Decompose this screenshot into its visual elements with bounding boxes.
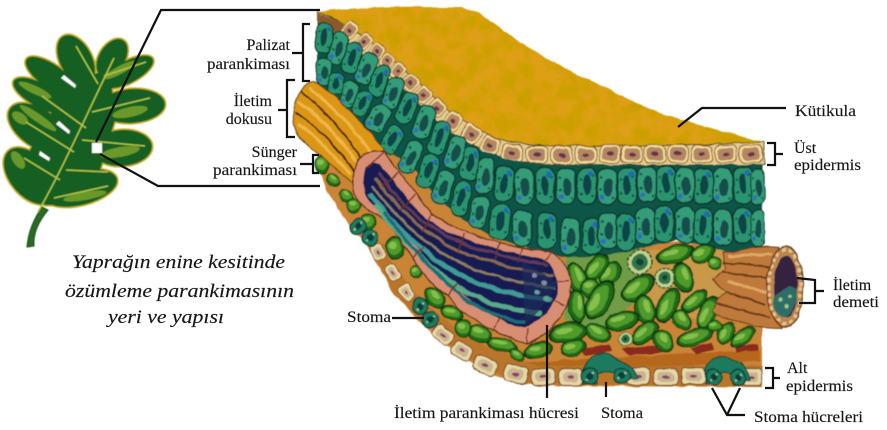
- label: Alt epidermis: Alt: [787, 360, 808, 377]
- caption: [65, 252, 294, 328]
- label: Üst epidermis: [767, 139, 861, 174]
- label: Stoma hücreleri: Stoma hücreleri: [754, 409, 864, 426]
- label: Kütikula: [678, 103, 856, 127]
- upper epidermis: [318, 11, 764, 165]
- leaf outline: [0, 29, 166, 214]
- cut-out sample square: [92, 143, 102, 153]
- label: İletim parankiması hücresi: İletim parankiması hücresi: [394, 404, 580, 422]
- label: Alt epidermis: [765, 360, 853, 395]
- label: İletim demeti: demeti: [833, 294, 880, 311]
- cuticle: [318, 7, 764, 148]
- leaf cross-section illustration: [293, 7, 803, 387]
- label: Üst epidermis: epidermis: [794, 157, 861, 174]
- vascular bundle longitudinal section: [353, 151, 571, 344]
- icon: oak leaf: [0, 29, 166, 247]
- label: Palizat parankiması: parankiması: [207, 56, 291, 73]
- stoma cells on lower surface: [412, 298, 750, 386]
- label: Stoma (bottom): Stoma: [601, 405, 643, 422]
- label: Alt epidermis: epidermis: [786, 378, 853, 395]
- label: Sünger parankiması: parankiması: [213, 162, 298, 179]
- label: Stoma hücreleri: [712, 388, 864, 426]
- vascular tissue fibres: [293, 82, 384, 182]
- label: İletim dokusu: dokusu: [226, 111, 272, 128]
- palisade parenchyma: [314, 22, 765, 257]
- label: İletim dokusu: İletim: [234, 93, 272, 110]
- bracket: Sünger parankiması: [213, 144, 319, 179]
- transverse vascular bundle: [712, 246, 803, 328]
- label: Kütikula: Kütikula: [795, 103, 856, 120]
- caption: Yaprağın enine kesitinde: [72, 252, 285, 273]
- label: Üst epidermis: Üst: [794, 139, 817, 157]
- leaf holes: [39, 75, 76, 161]
- leaf highlights: [8, 58, 149, 204]
- label: İletim demeti: [797, 276, 880, 311]
- label: Stoma (bottom): [601, 382, 643, 422]
- leaf veins: [24, 46, 150, 212]
- label: İletim demeti: İletim: [833, 276, 872, 294]
- label: Stoma (left): Stoma: [347, 309, 391, 326]
- mesophyll background: [318, 85, 762, 387]
- callout lines from leaf to section: [96, 10, 320, 186]
- label: Sünger parankiması: Sünger: [252, 144, 297, 161]
- bracket: Palizat parankiması: [207, 24, 310, 81]
- spongy parenchyma cells: [315, 156, 758, 364]
- label: Palizat parankiması: Palizat: [246, 37, 290, 54]
- leaf blade: [0, 29, 166, 214]
- lower epidermis and left edge: [369, 242, 762, 387]
- leaf stem: [27, 207, 48, 247]
- caption: yeri ve yapısı: [106, 307, 224, 328]
- bracket: İletim dokusu: [226, 80, 295, 137]
- label: Stoma (left): [347, 309, 424, 326]
- caption: özümleme parankimasının: [65, 281, 294, 302]
- mesophyll patches: [470, 248, 762, 372]
